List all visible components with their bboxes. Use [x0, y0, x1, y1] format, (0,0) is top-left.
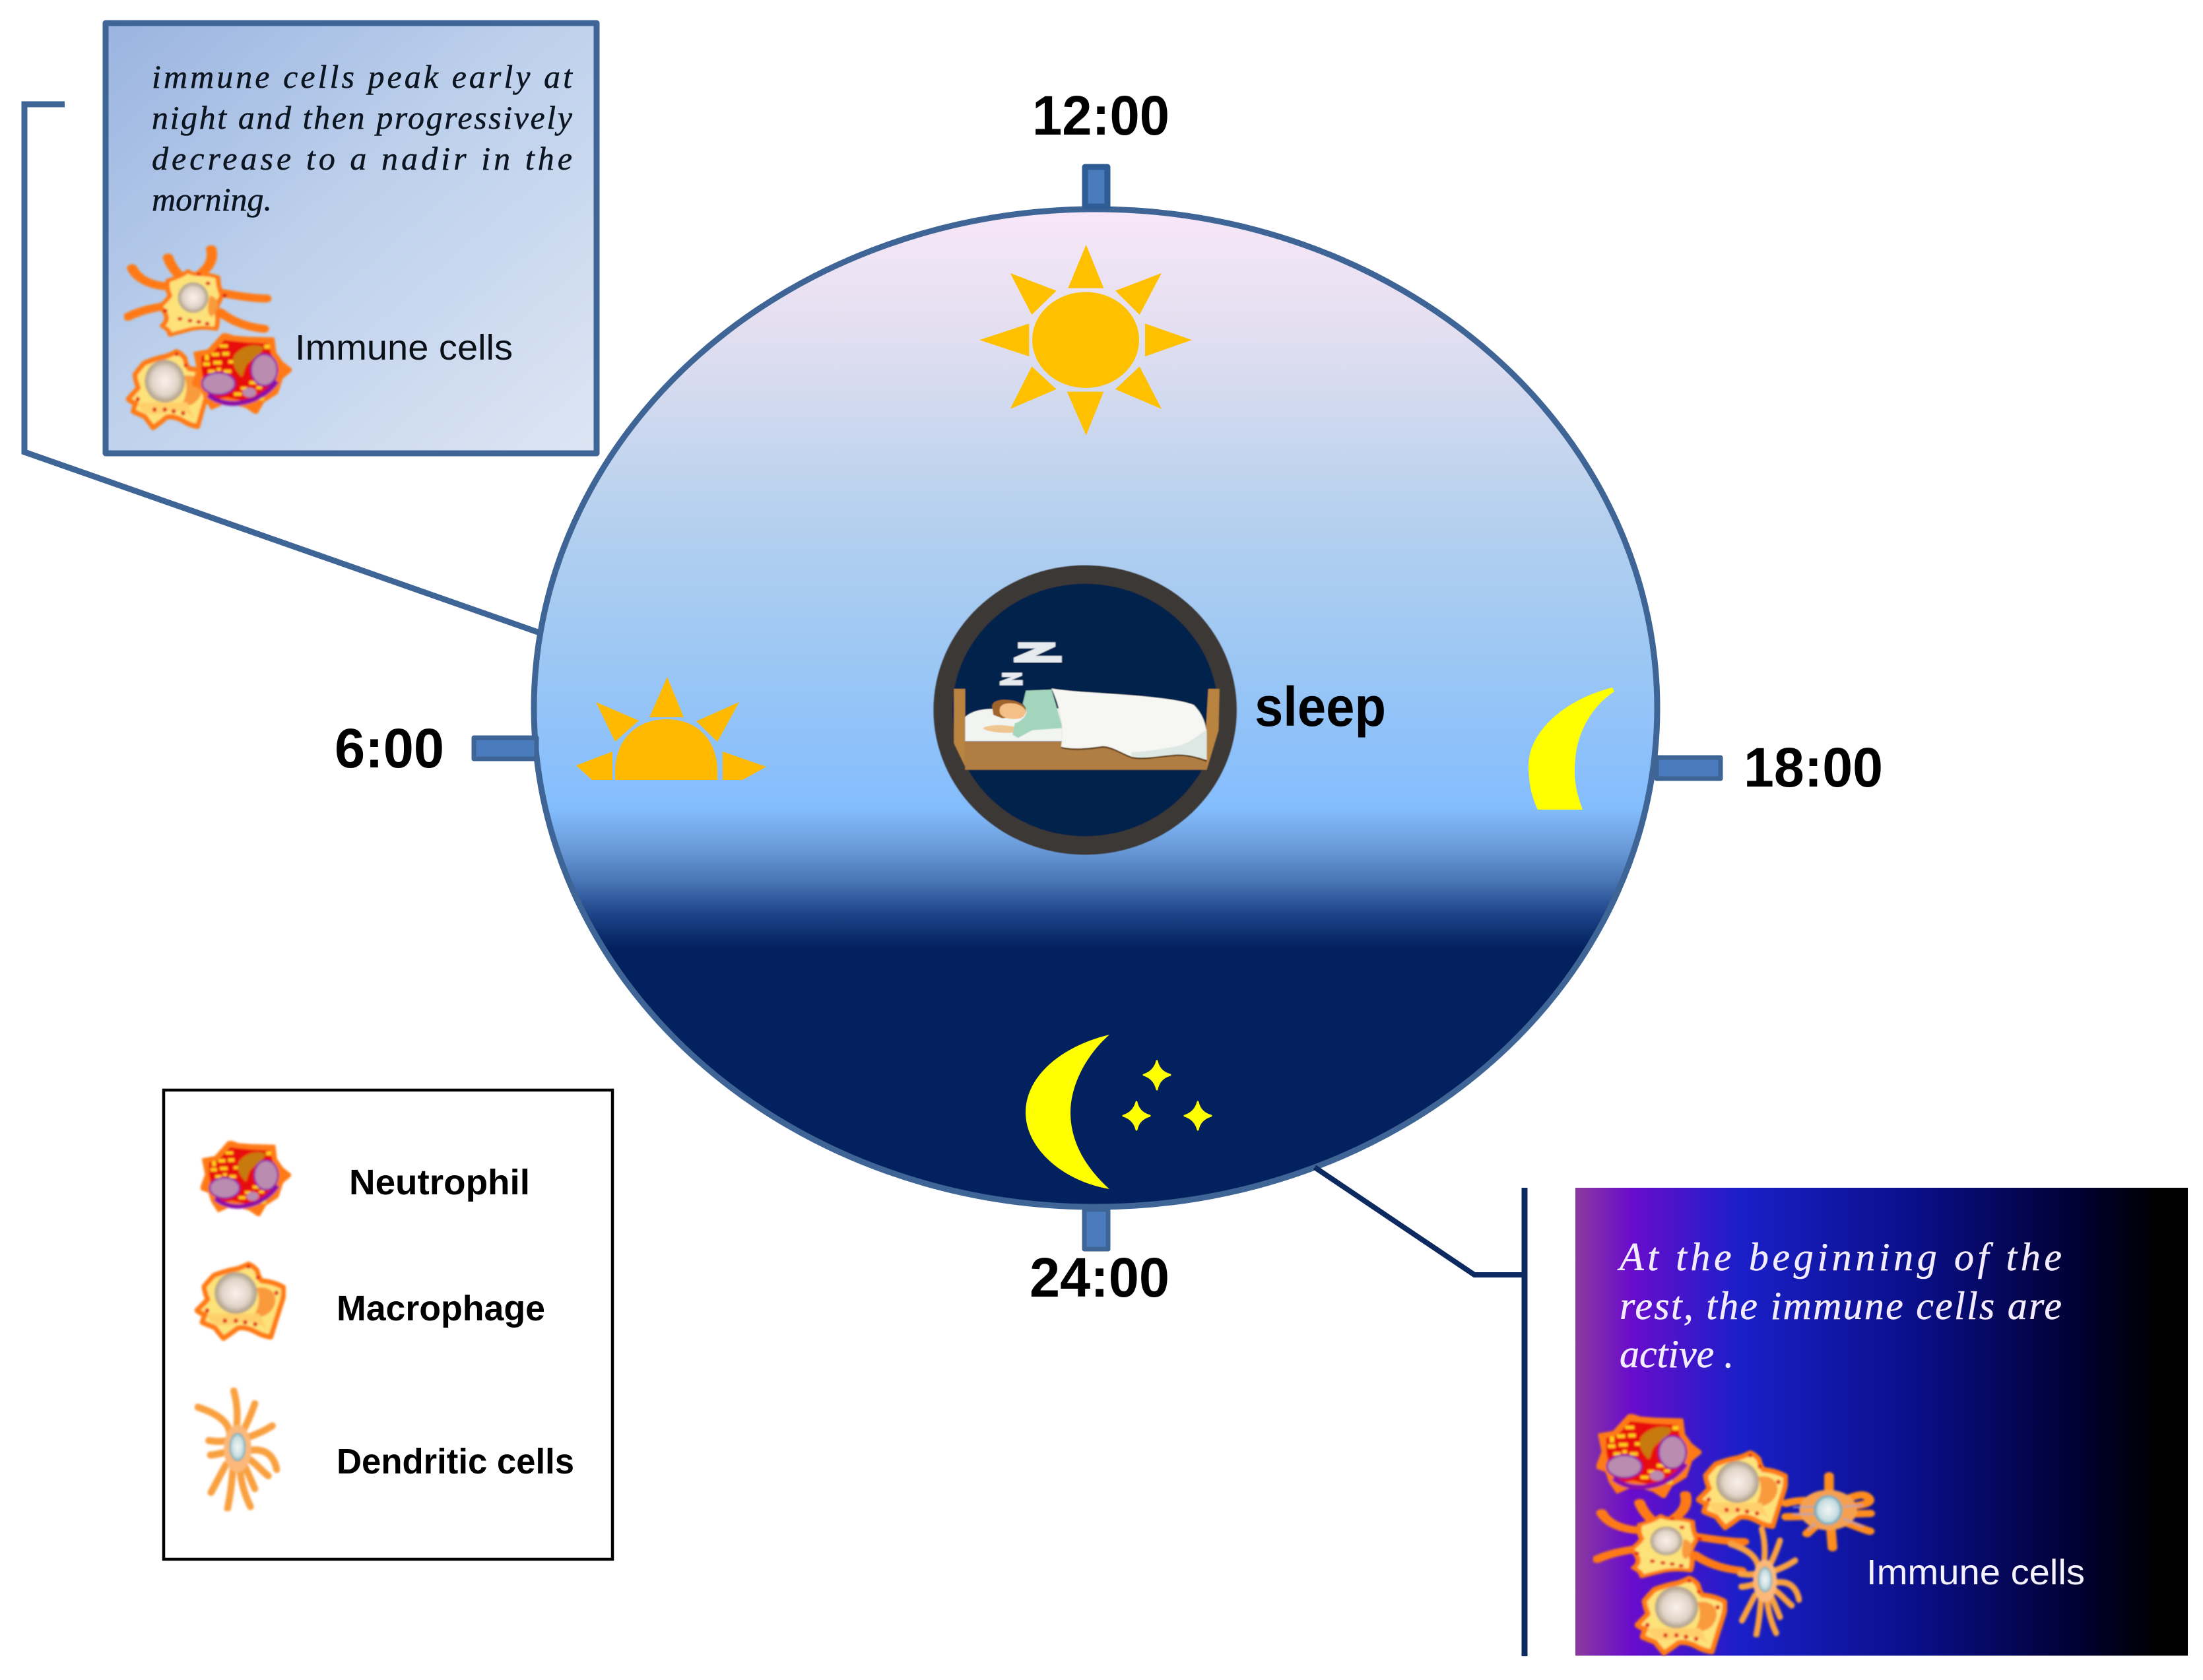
panel: legend — [164, 1090, 612, 1559]
icon: rising sun — [576, 677, 766, 780]
icon: evening crescent moon — [1529, 688, 1614, 810]
bracket: night panel — [1522, 1188, 1527, 1656]
tick: 24:00 — [1084, 1210, 1108, 1249]
label: 6:00: 6:00 — [335, 717, 444, 779]
text block: morning description: immune cells peak early at — [152, 58, 573, 95]
clock circle: day and night sky — [534, 209, 1657, 1207]
icon: sleeping person in bed — [933, 565, 1237, 855]
icon: morning cell cluster — [128, 249, 292, 428]
legend label: neutrophil: Neutrophil — [349, 1163, 530, 1202]
text block: morning description — [152, 58, 573, 218]
panel: morning immune cells — [106, 23, 597, 453]
text block: morning description: night and then progressively — [152, 99, 573, 136]
legend icon: macrophage — [197, 1264, 284, 1338]
icon: midnight moon and stars — [1026, 1035, 1211, 1189]
connector: night panel to clock — [1315, 1167, 1525, 1275]
text block: night description: At the beginning of the — [1617, 1235, 2062, 1279]
panel: night immune cells — [1575, 1188, 2188, 1656]
tick: 6:00 — [474, 738, 537, 759]
label: 24:00: 24:00 — [1030, 1246, 1169, 1308]
text block: night description — [1617, 1235, 2062, 1376]
label: 18:00: 18:00 — [1744, 736, 1883, 798]
legend label: macrophage: Macrophage — [337, 1289, 545, 1328]
legend icon: neutrophil — [201, 1141, 291, 1216]
tick: 18:00 — [1657, 758, 1721, 779]
icon: noon sun — [979, 245, 1192, 436]
text block: morning description: decrease to a nadir in the — [152, 140, 572, 177]
label: 12:00: 12:00 — [1032, 84, 1169, 146]
label: sleep: sleep — [1255, 676, 1386, 738]
connector: morning panel to clock — [24, 104, 538, 632]
legend icon: dendritic cell — [198, 1391, 277, 1508]
label: immune cells, morning: Immune cells — [295, 328, 513, 368]
text block: night description: rest, the immune cells are — [1620, 1284, 2062, 1328]
text block: night description: active . — [1620, 1332, 1734, 1376]
icon: night cell cluster — [1596, 1414, 1870, 1653]
tick: 12:00 — [1085, 167, 1107, 207]
label: immune cells, night: Immune cells — [1866, 1553, 2085, 1592]
text block: morning description: morning. — [152, 181, 272, 218]
legend label: dendritic cells: Dendritic cells — [337, 1442, 574, 1481]
